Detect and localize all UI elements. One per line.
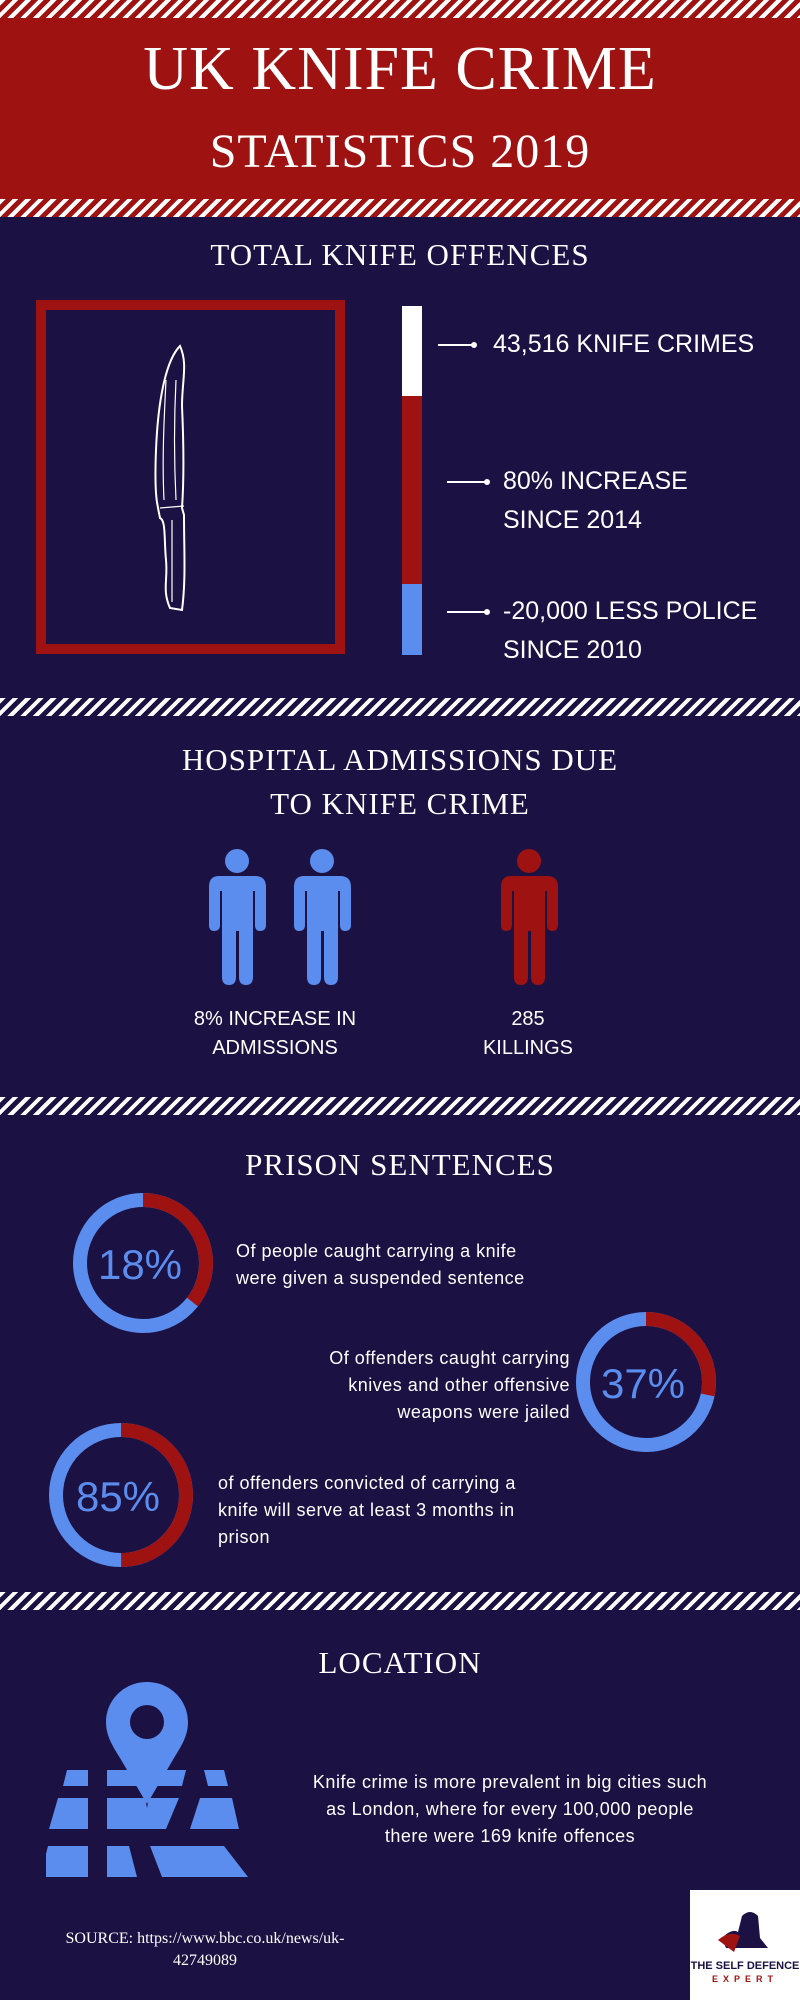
heading: hospital admissions: HOSPITAL ADMISSIONS DUE (182, 742, 618, 777)
text: 37% (329, 1348, 570, 1422)
panel: knife frame (36, 300, 345, 654)
text: admissions (194, 1008, 356, 1059)
text: 18% (236, 1241, 525, 1288)
stat: police (447, 597, 757, 664)
icon: people (209, 849, 558, 985)
text: location: as London, where for every 100,000 people (326, 1799, 694, 1819)
title: UK KNIFE CRIME (143, 35, 657, 103)
bar chart: stacked (402, 306, 422, 655)
text: location (313, 1772, 707, 1846)
icon: knife (154, 344, 186, 612)
donut 37%: 37% (601, 1360, 685, 1407)
donut 85%: 85% (76, 1473, 160, 1520)
text: location: there were 169 knife offences (385, 1826, 635, 1846)
heading: hospital admissions: TO KNIFE CRIME (270, 786, 530, 821)
text: killings: KILLINGS (483, 1037, 573, 1059)
text: 85%: knife will serve at least 3 months in (218, 1500, 515, 1520)
text: 18%: were given a suspended sentence (236, 1268, 525, 1288)
heading: total knife offences: TOTAL KNIFE OFFENCES (210, 237, 590, 272)
heading: hospital admissions (182, 742, 618, 821)
text: admissions: 8% INCREASE IN (194, 1008, 356, 1030)
donut 18%: 18% (98, 1241, 182, 1288)
subtitle: STATISTICS 2019 (210, 125, 590, 178)
icon: map pin (46, 1682, 248, 1877)
logo (690, 1890, 800, 2000)
header band (0, 0, 800, 217)
donut 85% (49, 1423, 193, 1567)
text: killings: 285 (511, 1008, 545, 1030)
heading: location: LOCATION (318, 1645, 482, 1680)
stat: police: -20,000 LESS POLICE (503, 597, 757, 625)
source: SOURCE: https://www.bbc.co.uk/news/uk-42749089 (66, 1930, 344, 1969)
stat: increase: SINCE 2014 (503, 506, 642, 534)
text: location: Knife crime is more prevalent in big cities such (313, 1772, 707, 1792)
text: admissions: ADMISSIONS (212, 1037, 338, 1059)
stat: increase (447, 467, 688, 534)
stat: increase: 80% INCREASE (503, 467, 688, 495)
logo: THE SELF DEFENCE (691, 1960, 799, 1972)
heading: prison sentences: PRISON SENTENCES (245, 1147, 555, 1182)
text: 37%: knives and other offensive (348, 1375, 570, 1395)
donut 18% (73, 1193, 213, 1333)
donut 37% (576, 1312, 716, 1452)
text: 37%: Of offenders caught carrying (329, 1348, 570, 1368)
text: killings (483, 1008, 573, 1059)
stat: police: SINCE 2010 (503, 636, 642, 664)
text: 37%: weapons were jailed (397, 1402, 570, 1422)
text: 85%: of offenders convicted of carrying a (218, 1473, 516, 1493)
text: 18%: Of people caught carrying a knife (236, 1241, 517, 1261)
stat: knife crimes: 43,516 KNIFE CRIMES (493, 330, 754, 358)
text: 85% (218, 1473, 516, 1547)
text: 85%: prison (218, 1527, 270, 1547)
logo: EXPERT (712, 1974, 778, 1984)
